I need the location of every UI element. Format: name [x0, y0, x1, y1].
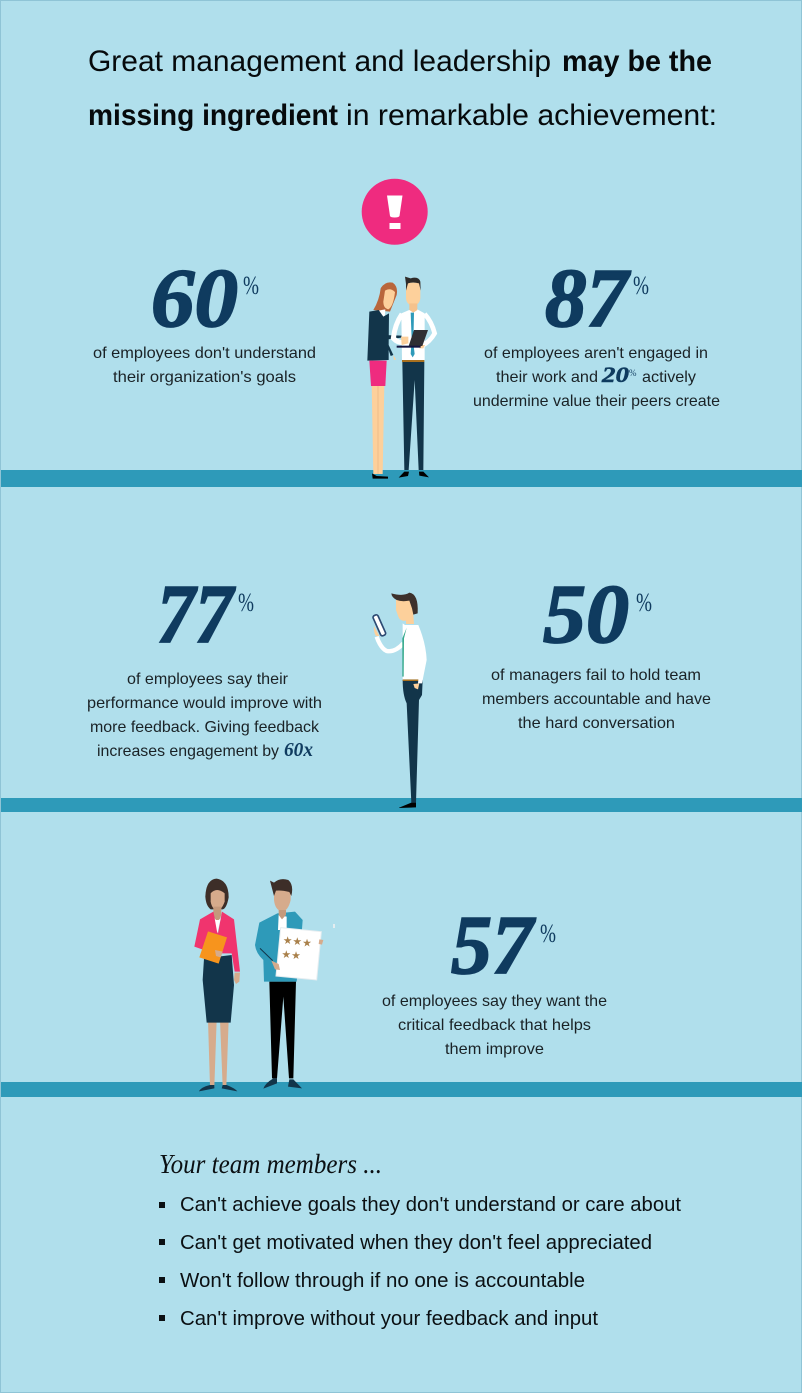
stat: 57 percent: them improve: [445, 1041, 544, 1058]
stat: 77 percent: performance would improve with: [87, 695, 322, 712]
rating stars: ★: [291, 949, 301, 962]
stat: 50 percent: %: [636, 588, 652, 617]
stat: 57 percent: of employees say they want the: [382, 993, 607, 1010]
woman: [367, 282, 402, 479]
illustration: two colleagues with rating card: [194, 879, 335, 1091]
bullet list: [159, 1194, 681, 1330]
woman: [194, 879, 240, 1091]
stat: 77 percent: increases engagement by: [97, 743, 279, 760]
title: missing ingredient: [88, 99, 338, 132]
stat: 87 percent: [473, 252, 720, 410]
stat: 57 percent: [382, 899, 607, 1058]
title: in remarkable achievement:: [346, 99, 717, 132]
stat: 60 percent: their organization's goals: [113, 369, 296, 386]
stat: 50 percent: of managers fail to hold team: [491, 667, 701, 684]
rating stars: ★: [302, 936, 312, 949]
title: Great management and leadership: [88, 45, 551, 78]
stat: 77 percent: %: [238, 588, 254, 617]
stat: 87 percent: their work and: [496, 369, 598, 386]
stat: 60 percent: %: [243, 271, 259, 300]
stat: 60 percent: [93, 252, 316, 386]
illustration: colleagues with laptop: [367, 277, 435, 479]
stat: 57 percent: critical feedback that helps: [398, 1017, 591, 1034]
stat: 57 percent: %: [540, 919, 556, 948]
stat: 77 percent: of employees say their: [127, 671, 289, 688]
rating stars: ★: [283, 934, 292, 947]
stat: 87 percent: %: [629, 368, 637, 378]
stat: 77 percent: 77: [157, 568, 236, 661]
heading: your team members: Your team members ...: [159, 1149, 382, 1179]
illustration: man looking at phone: [372, 593, 427, 808]
bullet list: Won't follow through if no one is accountable: [180, 1270, 585, 1292]
stat: 60 percent: 60: [151, 252, 238, 345]
icon: exclamation badge: [362, 179, 428, 245]
stat: 77 percent: [87, 568, 322, 761]
man: [255, 879, 335, 1089]
stat: 57 percent: 57: [451, 899, 536, 992]
bullet list: Can't get motivated when they don't feel appreciated: [180, 1232, 652, 1254]
stat: 60 percent: of employees don't understand: [93, 345, 316, 362]
stat: 77 percent: more feedback. Giving feedback: [90, 719, 320, 736]
stat: 77 percent: 60x: [284, 739, 313, 761]
stat: 87 percent: of employees aren't engaged in: [484, 345, 708, 362]
stat: 50 percent: 50: [543, 568, 629, 661]
title: [88, 45, 717, 132]
bullet list: Can't improve without your feedback and input: [180, 1308, 598, 1330]
stat: 87 percent: actively: [642, 369, 696, 386]
stat: 87 percent: 20: [601, 362, 629, 387]
rating stars: ★: [293, 935, 302, 948]
title: may be the: [562, 45, 712, 78]
bullet list: Can't achieve goals they don't understand or care about: [180, 1194, 681, 1216]
stat: 50 percent: members accountable and have: [482, 691, 711, 708]
rating stars: [282, 934, 312, 962]
stat: 50 percent: the hard conversation: [518, 715, 675, 732]
rating stars: ★: [282, 948, 291, 961]
man: [393, 277, 435, 478]
stat: 50 percent: [482, 568, 711, 732]
stat: 87 percent: 87: [545, 252, 631, 345]
stat: 87 percent: %: [633, 271, 649, 300]
stat: 87 percent: undermine value their peers create: [473, 393, 720, 410]
